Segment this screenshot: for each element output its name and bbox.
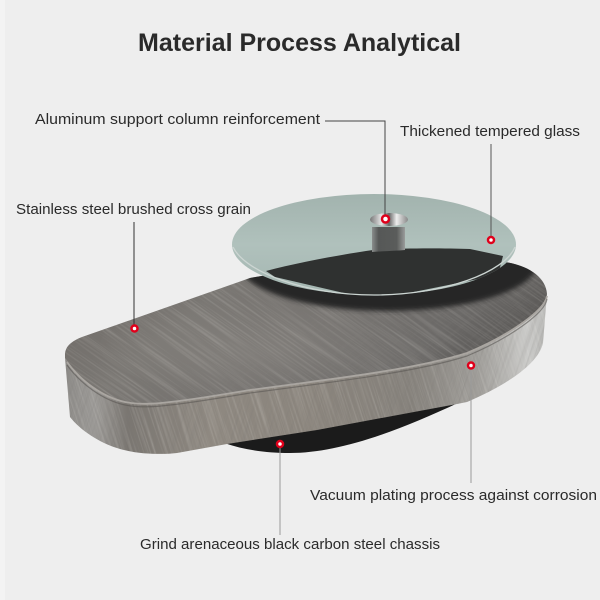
- support column: [372, 227, 405, 252]
- glass disc: [232, 194, 516, 300]
- base side: brushed steel edge: [65, 294, 547, 454]
- callout: aluminum column: Aluminum support column reinforcement: [35, 112, 320, 128]
- title: Material Process Analytical: [138, 29, 461, 57]
- callout: vacuum plating: [310, 362, 597, 504]
- shadow under glass: [244, 262, 536, 314]
- base top texture: [66, 262, 546, 403]
- callout: tempered glass: Thickened tempered glass: [400, 124, 580, 140]
- base top: brushed steel surface: [65, 260, 547, 404]
- callout: chassis: [140, 441, 440, 553]
- callout: aluminum column: [35, 112, 389, 222]
- glass rim: [233, 247, 515, 295]
- callout: chassis: Grind arenaceous black carbon steel chassis: [140, 537, 440, 553]
- product illustration: table: [65, 194, 547, 454]
- glass reflection: [266, 248, 503, 300]
- callout: brushed steel: [16, 202, 251, 332]
- column cap: [370, 213, 408, 226]
- base edge shadow: [67, 299, 547, 407]
- callout: tempered glass: [400, 124, 580, 243]
- callout: brushed steel: Stainless steel brushed cross grain: [16, 202, 251, 218]
- chassis: black carbon steel: [224, 402, 460, 453]
- base edge highlight: [67, 296, 547, 404]
- base side texture: [65, 294, 547, 454]
- callout: vacuum plating: Vacuum plating process against corrosion: [310, 488, 597, 504]
